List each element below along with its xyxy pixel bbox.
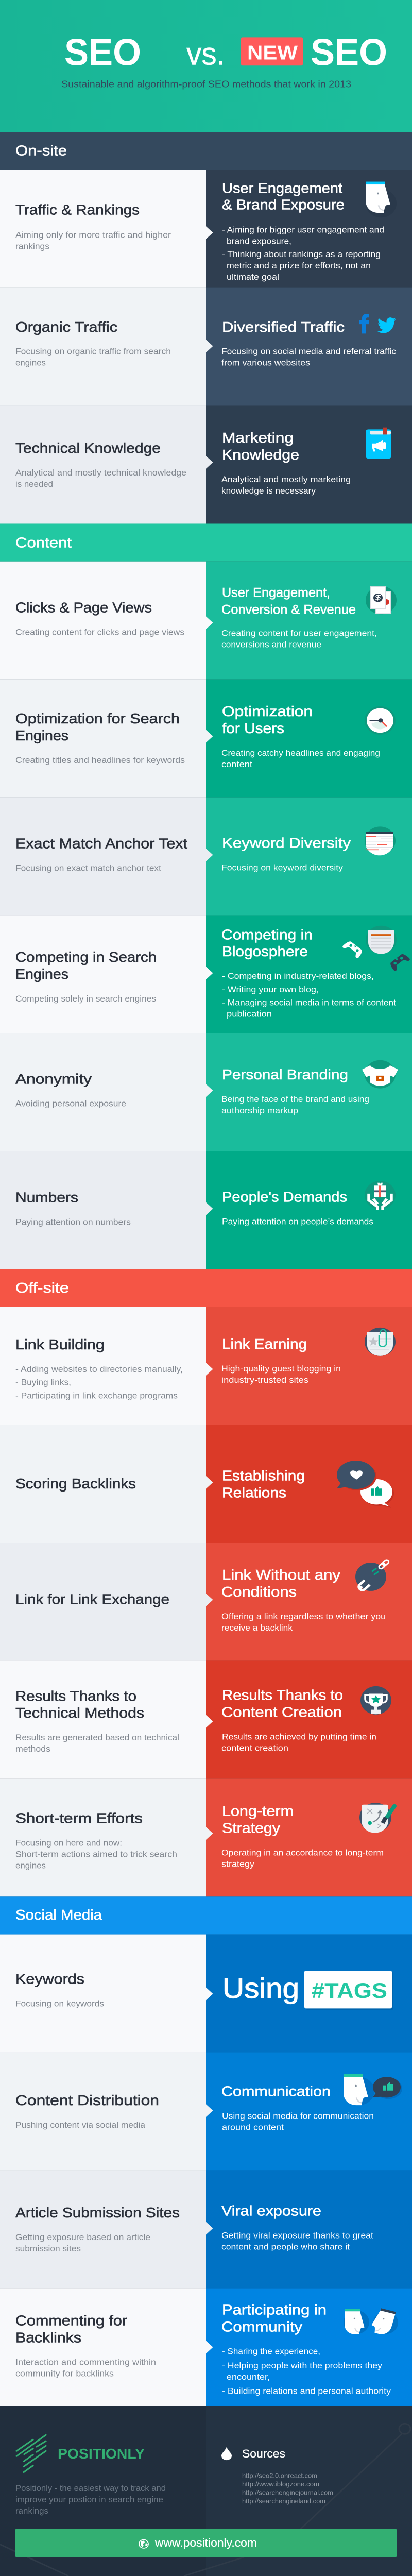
tag badge (304, 1971, 393, 2010)
left panel: old SEO: Focusing on keywords (15, 1998, 104, 2009)
right panel: new SEO: Link Earning (222, 1336, 307, 1352)
sources list: http://searchengineland.com (242, 2498, 325, 2505)
row: Clicks & Page Views (0, 562, 412, 680)
right panel: new SEO: Analytical and mostly marketing (221, 474, 351, 484)
left panel: old SEO: engines (15, 358, 46, 368)
right panel: new SEO: Long-term (222, 1804, 294, 1819)
right panel: new SEO: Establishing (222, 1468, 305, 1484)
left panel: old SEO: Anonymity (15, 1072, 92, 1087)
right panel: new SEO: strategy (221, 1859, 254, 1869)
left panel: old SEO: Backlinks (15, 2330, 81, 2346)
left panel: old SEO (0, 1033, 206, 1151)
left panel: old SEO (0, 2288, 206, 2406)
left panel: old SEO: Content Distribution (15, 2093, 159, 2109)
right panel: new SEO: High-quality guest blogging in (221, 1364, 341, 1374)
left panel: old SEO (0, 2053, 206, 2170)
right panel: new SEO: Content Creation (221, 1705, 342, 1720)
right panel: new SEO: User Engagement (222, 181, 342, 196)
left panel: old SEO (0, 1543, 206, 1660)
left panel: old SEO: community for backlinks (15, 2368, 114, 2378)
left panel: old SEO: engines (15, 1860, 46, 1870)
left panel: old SEO: Analytical and mostly technical knowledge (15, 468, 186, 478)
left panel: old SEO: Competing in Search (15, 950, 157, 965)
right panel: new SEO: Focusing on keyword diversity (221, 862, 343, 872)
right panel: new SEO: People's Demands (222, 1190, 347, 1205)
left panel: old SEO: Focusing on exact match anchor text (15, 863, 161, 873)
right panel: new SEO: Community (221, 2319, 303, 2335)
right panel: new SEO (206, 1935, 412, 2053)
right panel: new SEO: from various websites (221, 358, 310, 368)
right panel: new SEO: for Users (222, 721, 284, 737)
left panel: old SEO (0, 1778, 206, 1896)
row: Technical Knowledge (0, 406, 412, 523)
company description: improve your postion in search engine (15, 2495, 163, 2504)
left panel: old SEO (0, 170, 206, 288)
right panel: new SEO: User Engagement, (222, 586, 330, 600)
right panel: new SEO: content creation (221, 1743, 288, 1753)
right panel: new SEO: Blogosphere (222, 944, 308, 960)
subtitle: Sustainable and algorithm-proof SEO methods that work in 2013 (61, 79, 351, 90)
right panel: new SEO: - Competing in industry-related blogs, (222, 971, 374, 981)
right panel: new SEO: Using social media for communication (222, 2111, 374, 2121)
left panel: old SEO (0, 1935, 206, 2053)
section heading: On-site (15, 143, 67, 159)
left panel: old SEO: Organic Traffic (15, 319, 117, 335)
left panel: old SEO: Interaction and commenting within (15, 2357, 156, 2367)
right panel: new SEO: Optimization (222, 704, 313, 720)
left panel: old SEO (0, 2170, 206, 2288)
icon: chat bubbles (337, 1461, 394, 1508)
left panel: old SEO: Short-term actions aimed to trick search (15, 1849, 177, 1859)
left panel: old SEO (0, 562, 206, 680)
left panel: old SEO: submission sites (15, 2244, 81, 2253)
right panel: new SEO: Results Thanks to (222, 1688, 343, 1703)
left panel: old SEO: Engines (15, 967, 68, 982)
right panel: new SEO: brand exposure, (227, 236, 291, 246)
right panel: new SEO (206, 1151, 412, 1269)
website button (15, 2529, 397, 2557)
icon: clock (365, 706, 396, 735)
sources list: http://www.iblogzone.com (242, 2481, 319, 2488)
right panel: new SEO (206, 1778, 412, 1896)
row: Keywords (0, 1935, 412, 2053)
right panel: new SEO (206, 2288, 412, 2406)
right panel: new SEO (206, 916, 412, 1033)
left panel: old SEO: Commenting for (15, 2313, 127, 2329)
right panel: new SEO (206, 1033, 412, 1151)
left panel: old SEO: Results Thanks to (15, 1688, 136, 1704)
right panel: new SEO: Communication (221, 2084, 331, 2099)
icon: globe (139, 2539, 148, 2548)
section: On-site (0, 132, 412, 170)
row: Numbers (0, 1151, 412, 1269)
row: Organic Traffic (0, 288, 412, 406)
right panel: new SEO (206, 406, 412, 523)
left panel: old SEO: Engines (15, 728, 68, 743)
right panel: new SEO: & Brand Exposure (222, 197, 345, 213)
title: vs. (186, 36, 225, 72)
footer (0, 2406, 412, 2576)
left panel: old SEO: Technical Knowledge (15, 440, 161, 456)
company description: Positionly - the easiest way to track and (15, 2483, 166, 2493)
website button: www.positionly.com (154, 2536, 257, 2549)
right panel: new SEO: knowledge is necessary (221, 486, 316, 496)
right panel: new SEO (206, 1307, 412, 1425)
sources list (242, 2472, 333, 2505)
right panel: new SEO: Focusing on social media and referral traffic (221, 346, 396, 357)
left panel: old SEO: Pushing content via social media (15, 2120, 145, 2130)
section: Social Media (0, 1896, 412, 1935)
left panel: old SEO (0, 1660, 206, 1778)
right panel: new SEO: Operating in an accordance to long-term (221, 1848, 384, 1857)
section heading: Off-site (15, 1280, 69, 1296)
icon: broken chain (355, 1559, 389, 1592)
left panel: old SEO: Avoiding personal exposure (15, 1098, 126, 1108)
right panel: new SEO: Creating content for user engagement, (221, 628, 377, 638)
left panel: old SEO: rankings (15, 241, 49, 251)
right panel: new SEO: Being the face of the brand and using (221, 1094, 369, 1104)
left panel: old SEO (0, 916, 206, 1033)
title: SEO (311, 31, 387, 74)
left panel: old SEO (0, 680, 206, 798)
left panel: old SEO: Creating content for clicks and page views (15, 627, 184, 637)
row: Commenting for Backlinks (0, 2288, 412, 2406)
left panel: old SEO: Clicks & Page Views (15, 600, 152, 616)
icon: head (366, 182, 397, 217)
left panel: old SEO: - Buying links, (15, 1377, 71, 1387)
right panel: new SEO: Conditions (221, 1584, 297, 1600)
left panel: old SEO: Scoring Backlinks (15, 1476, 136, 1492)
right panel: new SEO: - Writing your own blog, (222, 985, 319, 994)
row: Anonymity (0, 1033, 412, 1151)
company description (15, 2483, 166, 2516)
sources list: http://searchenginejournal.com (242, 2489, 333, 2496)
section: Content (0, 523, 412, 562)
right panel: new SEO (206, 170, 412, 288)
right panel: new SEO (206, 1425, 412, 1543)
right panel: new SEO: around content (222, 2122, 284, 2132)
right panel: new SEO: - Helping people with the problems they (222, 2361, 382, 2370)
left panel: old SEO (0, 406, 206, 523)
right panel: new SEO: receive a backlink (221, 1623, 293, 1633)
left panel: old SEO: Paying attention on numbers (15, 1217, 131, 1227)
right panel: new SEO: Diversified Traffic (222, 319, 345, 335)
left panel: old SEO (0, 288, 206, 406)
left panel: old SEO: Creating titles and headlines for keywords (15, 755, 185, 765)
left panel: old SEO: Keywords (15, 1972, 84, 1987)
row: Optimization for Search Engines (0, 680, 412, 798)
right panel: new SEO: publication (227, 1009, 272, 1019)
right panel: new SEO: content (221, 759, 252, 769)
left panel: old SEO: Link Building (15, 1337, 105, 1353)
left panel: old SEO: - Adding websites to directories manually, (15, 1364, 183, 1374)
right panel: new SEO: encounter, (227, 2372, 270, 2382)
icon: marketing book (366, 428, 391, 459)
row: Traffic & Rankings (0, 170, 412, 288)
row: Scoring Backlinks (0, 1425, 412, 1543)
title: NEW (247, 42, 298, 64)
right panel: new SEO: metric and a prize for efforts, not an (227, 261, 371, 270)
left panel: old SEO: - Participating in link exchange programs (15, 1391, 178, 1400)
right panel: new SEO: Marketing (222, 430, 294, 446)
right panel: new SEO (206, 1660, 412, 1778)
sources list: http://seo2.0.onreact.com (242, 2472, 317, 2479)
icon: twitter (377, 317, 396, 333)
title (64, 31, 387, 74)
left panel: old SEO: Getting exposure based on article (15, 2232, 150, 2242)
left panel: old SEO: Article Submission Sites (15, 2205, 180, 2221)
right panel: new SEO: - Thinking about rankings as a reporting (222, 249, 381, 259)
left panel: old SEO: Exact Match Anchor Text (15, 836, 187, 852)
left panel: old SEO: Focusing on organic traffic from search (15, 346, 171, 357)
right panel: new SEO (206, 562, 412, 680)
right panel: new SEO: industry-trusted sites (221, 1375, 308, 1385)
right panel: new SEO (206, 1543, 412, 1660)
row: Results Thanks to Technical Methods (0, 1660, 412, 1778)
right panel: new SEO: conversions and revenue (221, 639, 321, 649)
left panel: old SEO: Short-term Efforts (15, 1811, 143, 1826)
right panel: new SEO: Offering a link regardless to whether you (221, 1612, 386, 1621)
right panel: new SEO: ultimate goal (227, 272, 279, 282)
row: Link Building (0, 1307, 412, 1425)
row: Competing in Search Engines (0, 916, 412, 1033)
left panel: old SEO: methods (15, 1744, 50, 1754)
sources heading: Sources (242, 2447, 285, 2460)
right panel: new SEO: Using (222, 1973, 299, 2005)
icon: drop (221, 2447, 232, 2460)
right panel: new SEO: authorship markup (221, 1106, 298, 1115)
right panel: new SEO: Link Without any (222, 1567, 341, 1583)
left panel: old SEO (0, 1425, 206, 1543)
left panel: old SEO: Optimization for Search (15, 711, 180, 727)
right panel: new SEO: Strategy (222, 1821, 281, 1836)
right panel: new SEO (206, 798, 412, 916)
icon: strategy board (359, 1803, 394, 1833)
row: Exact Match Anchor Text (0, 798, 412, 916)
left panel: old SEO: Focusing on here and now: (15, 1838, 122, 1848)
left panel: old SEO: Traffic & Rankings (15, 202, 140, 218)
title: SEO (64, 31, 141, 74)
positionly logo (16, 2435, 145, 2472)
right panel: new SEO: Relations (222, 1485, 286, 1501)
tag badge: #TAGS (312, 1979, 387, 2003)
icon: t-shirt (362, 1060, 398, 1089)
icon: blog page (366, 926, 397, 954)
right panel: new SEO: Personal Branding (222, 1067, 348, 1083)
right panel: new SEO (206, 288, 412, 406)
icon: trophy (360, 1686, 391, 1715)
left panel: old SEO (0, 1151, 206, 1269)
right panel: new SEO: - Sharing the experience, (222, 2346, 320, 2356)
icon: money papers (366, 586, 397, 614)
icon: white gamepad (342, 940, 364, 959)
row: Article Submission Sites (0, 2170, 412, 2288)
icon: paper with paperclip (365, 1328, 396, 1356)
right panel: new SEO: - Building relations and personal authority (222, 2386, 391, 2396)
left panel: old SEO: Aiming only for more traffic and higher (15, 230, 171, 240)
right panel: new SEO: Participating in (222, 2302, 327, 2318)
section heading: Social Media (15, 1907, 102, 1923)
left panel: old SEO: Competing solely in search engines (15, 994, 156, 1004)
section heading: Content (15, 535, 72, 551)
positionly logo: POSITIONLY (58, 2446, 145, 2462)
right panel: new SEO (206, 2170, 412, 2288)
header banner (0, 0, 412, 132)
right panel: new SEO: Conversion & Revenue (221, 603, 356, 617)
right panel: new SEO: Knowledge (222, 447, 299, 463)
left panel: old SEO (0, 798, 206, 916)
icon: hands with gift (365, 1181, 396, 1210)
icon: keyword page (365, 826, 396, 855)
left panel: old SEO: Numbers (15, 1190, 78, 1206)
icon: facebook (359, 314, 369, 333)
right panel: new SEO: content and people who share it (221, 2242, 350, 2251)
row: Short-term Efforts (0, 1778, 412, 1896)
icon: head with speech bubble (344, 2074, 402, 2105)
right panel: new SEO: Viral exposure (221, 2203, 321, 2219)
right panel: new SEO: Keyword Diversity (222, 836, 351, 851)
icon: two heads (344, 2307, 398, 2336)
left panel: old SEO: is needed (15, 479, 53, 489)
right panel: new SEO: - Managing social media in terms of content (222, 997, 396, 1007)
right panel: new SEO: Results are achieved by putting time in (222, 1732, 376, 1741)
right panel: new SEO: Paying attention on people’s demands (222, 1216, 373, 1226)
left panel: old SEO: Technical Methods (15, 1705, 144, 1721)
right panel: new SEO: Getting viral exposure thanks to great (221, 2230, 373, 2240)
section: Off-site (0, 1269, 412, 1307)
left panel: old SEO (0, 1307, 206, 1425)
row: Link for Link Exchange (0, 1543, 412, 1660)
icon: dark gamepad (388, 953, 410, 972)
left panel: old SEO: Link for Link Exchange (15, 1592, 169, 1607)
right panel: new SEO: - Aiming for bigger user engagement and (222, 225, 384, 234)
company description: rankings (15, 2506, 48, 2516)
right panel: new SEO (206, 680, 412, 798)
right panel: new SEO: Competing in (221, 927, 313, 943)
right panel: new SEO (206, 2053, 412, 2170)
left panel: old SEO: Results are generated based on technical (15, 1733, 179, 1742)
right panel: new SEO: Creating catchy headlines and engaging (221, 748, 380, 758)
row: Content Distribution (0, 2053, 412, 2170)
